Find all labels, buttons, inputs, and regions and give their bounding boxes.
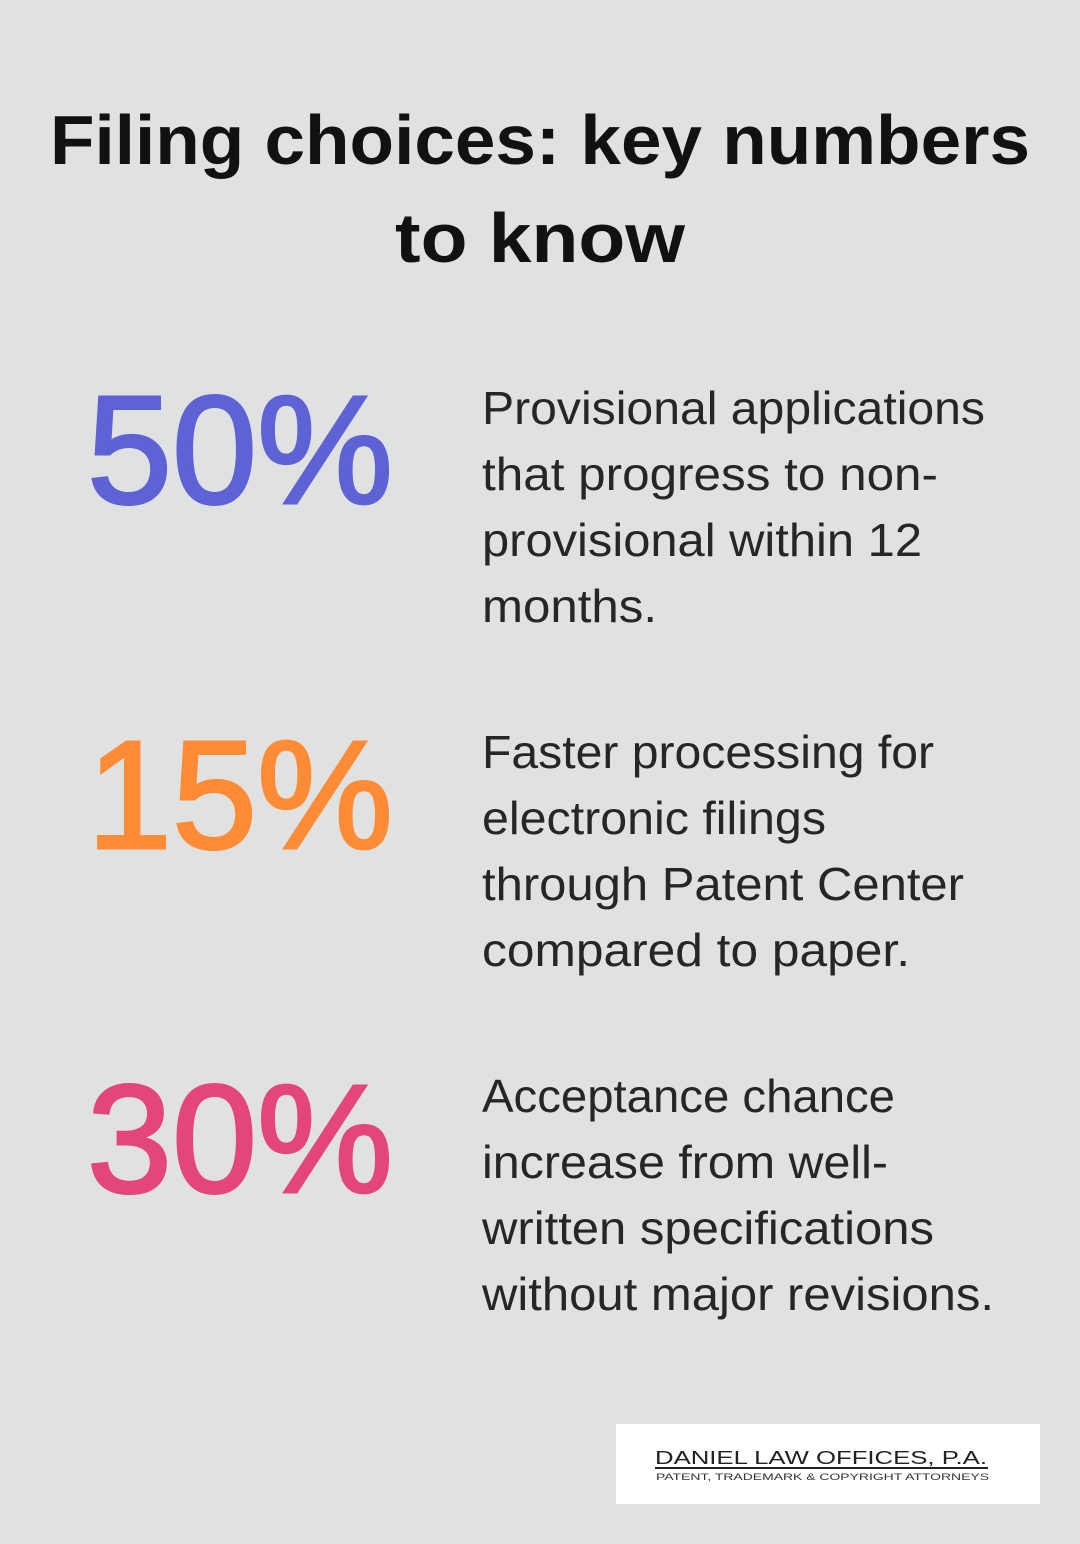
stat: 15% bbox=[87, 709, 964, 976]
description 50%: months. bbox=[482, 580, 657, 632]
title: Filing choices: key numbers bbox=[50, 101, 1030, 179]
description 15%: Faster processing for bbox=[482, 726, 934, 778]
description 50%: provisional within 12 bbox=[482, 514, 922, 566]
stat: 30% bbox=[87, 1053, 994, 1320]
description 15% bbox=[482, 726, 964, 976]
title: to know bbox=[395, 199, 686, 277]
number 50%: 50% bbox=[87, 364, 393, 536]
description 50% bbox=[482, 382, 985, 632]
description 30%: written specifications bbox=[481, 1202, 934, 1254]
logo: PATENT, TRADEMARK & COPYRIGHT ATTORNEYS bbox=[656, 1472, 989, 1482]
description 30%: without major revisions. bbox=[481, 1268, 994, 1320]
description 30%: Acceptance chance bbox=[482, 1070, 895, 1122]
description 15%: through Patent Center bbox=[482, 858, 964, 910]
description 30% bbox=[481, 1070, 994, 1320]
description 50%: Provisional applications bbox=[482, 382, 985, 434]
logo bbox=[616, 1424, 1040, 1504]
title bbox=[50, 101, 1030, 277]
description 30%: increase from well- bbox=[482, 1136, 888, 1188]
number 15%: 15% bbox=[87, 709, 393, 881]
description 15%: compared to paper. bbox=[482, 924, 910, 976]
stat: 50% bbox=[87, 364, 985, 632]
number 30%: 30% bbox=[87, 1053, 393, 1225]
logo: DANIEL LAW OFFICES, P.A. bbox=[655, 1448, 987, 1468]
description 50%: that progress to non- bbox=[482, 448, 938, 500]
description 15%: electronic filings bbox=[482, 792, 826, 844]
